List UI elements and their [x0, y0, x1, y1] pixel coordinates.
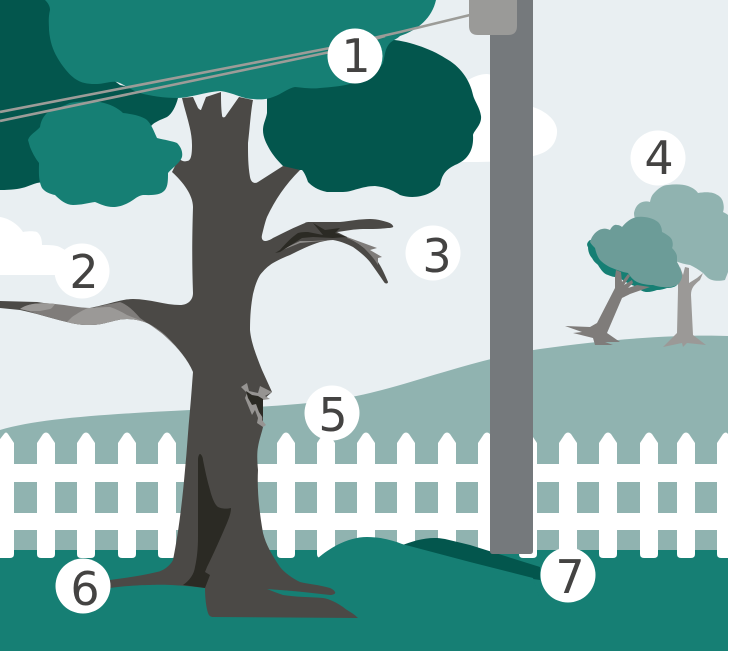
- small lower canopy: [28, 101, 182, 207]
- dark crack: [275, 223, 347, 253]
- number badge 2: [54, 244, 110, 299]
- leaning tree dark foliage edge: [587, 240, 677, 292]
- exposed wood: [20, 302, 193, 373]
- left dark canopy: [0, 0, 178, 190]
- number badge 3: [406, 226, 460, 283]
- main tree trunk and branches: [0, 92, 393, 618]
- transformer box: [469, 0, 517, 35]
- fence rails: [0, 464, 728, 482]
- right dark canopy: [263, 40, 481, 197]
- distant tree trunk: [663, 267, 706, 347]
- distant tree: upright: [634, 184, 728, 347]
- badge number: 2: [69, 245, 99, 299]
- badge circle: [630, 130, 686, 186]
- leaning tree trunk: [565, 268, 650, 345]
- badge circle: [328, 28, 382, 84]
- number badge 4: [630, 130, 686, 186]
- raised root mound shadow: [400, 538, 540, 580]
- wound crack: [246, 391, 263, 418]
- trunk cavity: [183, 454, 231, 588]
- back hill: [0, 336, 728, 560]
- bark wound (5): [241, 383, 272, 427]
- number badge 1: [328, 28, 382, 84]
- main canopy (teal): [45, 0, 436, 99]
- raised soil mound: [317, 537, 540, 600]
- badge circle: [56, 558, 110, 614]
- number badge 6: [56, 558, 110, 616]
- badge circle: [406, 226, 460, 280]
- power lines: [0, 15, 470, 121]
- fence: [0, 432, 728, 558]
- badge number: 7: [555, 550, 585, 604]
- badge number: 5: [318, 388, 348, 442]
- leaning tree canopy: [590, 217, 682, 287]
- fence pickets: [0, 432, 14, 558]
- wound edge: [241, 383, 272, 427]
- number badge 7: [540, 548, 596, 604]
- wood highlight: [20, 303, 55, 311]
- badge number: 6: [70, 562, 100, 616]
- distant tree: leaning: [565, 217, 682, 345]
- cloud: left: [0, 217, 68, 275]
- torn wood: [347, 237, 382, 265]
- badge circle: [54, 244, 110, 298]
- cloud: behind pole: [449, 74, 557, 162]
- ground: [0, 550, 728, 651]
- badge number: 1: [341, 29, 371, 83]
- upper wire: [0, 15, 470, 112]
- wood highlight lower: [67, 307, 147, 325]
- badge circle: [304, 386, 360, 440]
- damaged branch: stripped bark (2): [20, 302, 193, 373]
- utility pole: [490, 0, 533, 554]
- grey sliver under crack: [275, 240, 333, 253]
- torn branch split (3): [275, 223, 382, 265]
- distant tree canopy: [634, 184, 728, 281]
- badge circle: [540, 548, 596, 602]
- badge number: 3: [422, 229, 452, 283]
- lower wire: [0, 36, 385, 121]
- number badge 5: [304, 386, 360, 442]
- badge number: 4: [644, 131, 674, 185]
